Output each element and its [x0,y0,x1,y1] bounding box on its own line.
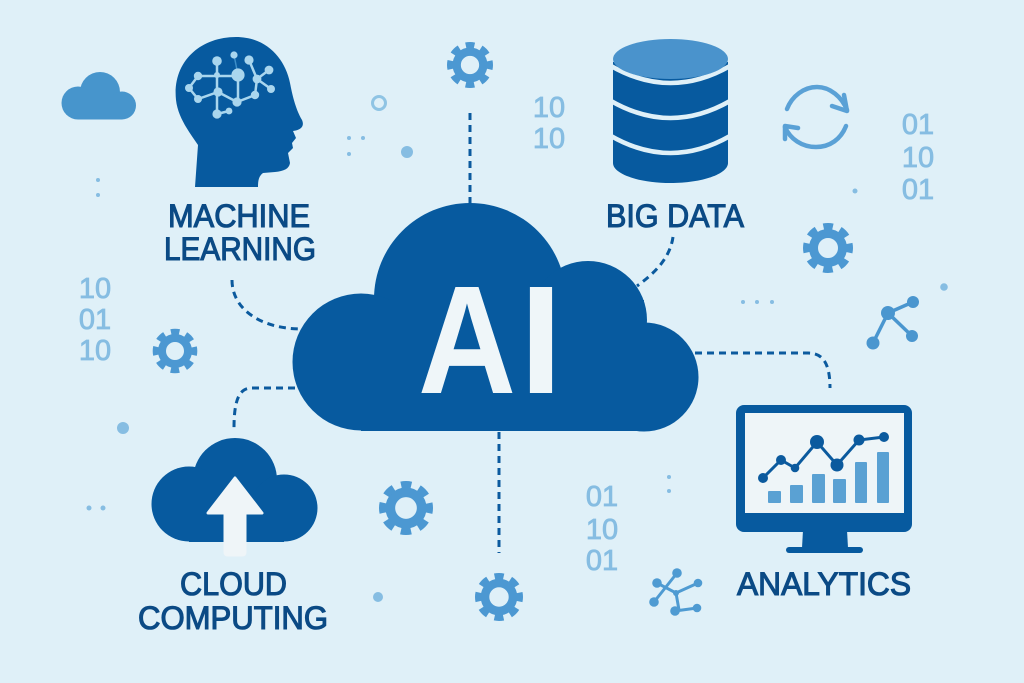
heading: big data: BIG DATA [606,198,745,234]
icon: network right [866,296,919,350]
icon: gear right [806,226,850,270]
binary digits: top right: 10 [902,142,934,174]
heading: machine learning: LEARNING [164,231,316,267]
binary digits: bottom centre: 01 [586,545,618,577]
icon: analytics monitor [736,405,912,553]
connector: AI to big data [637,237,673,286]
binary digits: bottom centre: 01 [586,481,618,513]
binary digits: left: 10 [79,273,111,305]
connector: AI to top gear [468,113,472,205]
icon: network bottom [649,568,702,616]
AI lettering: I [520,254,562,426]
binary digits: top centre [533,92,565,155]
binary digits: top right [902,109,934,206]
line chart [758,432,889,483]
binary digits: top centre: 10 [533,123,565,155]
heading: machine learning [164,198,316,267]
icon: gear left [156,332,194,370]
decorative dots [86,136,948,602]
binary digits: top right: 01 [902,174,934,206]
heading: cloud computing: CLOUD [180,566,287,602]
central AI cloud [292,203,698,432]
icon: database [611,39,730,183]
icon: small cloud [62,72,136,120]
binary digits: top right: 01 [902,109,934,141]
binary digits: left: 10 [79,335,111,367]
connector: AI to machine learning [232,280,302,329]
icon: gear lower centre left [382,484,430,532]
heading: cloud computing [138,566,328,636]
connector: AI to cloud computing [234,388,295,428]
binary digits: left: 01 [79,304,111,336]
connector: AI to analytics [695,353,830,388]
upload arrow [208,478,262,555]
icon: machine learning head [176,37,303,187]
connector: AI to bottom gear [498,432,500,553]
heading: cloud computing: COMPUTING [138,600,328,636]
AI lettering: A [418,254,516,426]
binary digits: top centre: 10 [533,92,565,124]
heading: analytics: ANALYTICS [737,566,911,602]
icon: cloud upload [152,438,318,555]
icon: gear bottom [478,576,520,618]
binary digits: bottom centre [586,481,618,577]
binary digits: bottom centre: 10 [586,514,618,546]
icon: gear top [450,45,490,85]
binary digits: left [79,273,111,367]
decorative ring [372,96,386,110]
brain network [185,51,275,119]
icon: refresh arrows [785,87,847,147]
heading: machine learning: MACHINE [168,198,310,234]
bar chart [768,452,889,503]
